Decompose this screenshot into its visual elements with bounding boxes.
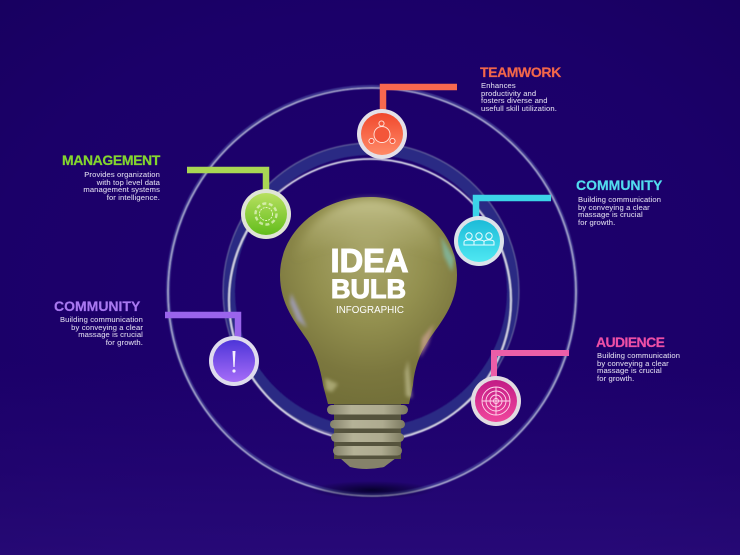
bulb title: IDEA <box>330 242 408 279</box>
bulb title: BULB <box>331 274 406 304</box>
text: community right: massage is crucial <box>578 210 643 219</box>
text: audience: Building communication <box>597 351 680 360</box>
bulb title <box>330 242 408 316</box>
inner glass ring <box>223 143 519 441</box>
light bulb <box>280 197 457 469</box>
text: community left: by conveying a clear <box>71 323 143 332</box>
connector: community left <box>165 315 238 342</box>
heading: teamwork: TEAMWORK <box>480 64 561 80</box>
node: teamwork <box>357 109 407 159</box>
icon: team circle <box>369 121 395 144</box>
text: community left <box>60 315 143 347</box>
node: community left <box>209 336 259 386</box>
outer glass ring <box>168 87 576 496</box>
text: teamwork: Enhances <box>481 81 516 90</box>
heading: community right: COMMUNITY <box>576 177 662 193</box>
connector: audience <box>494 353 569 382</box>
text: teamwork <box>481 81 557 113</box>
icon: people <box>464 233 494 245</box>
heading: community left: COMMUNITY <box>54 298 140 314</box>
heading: audience: AUDIENCE <box>596 334 664 350</box>
text: management: with top level data <box>97 178 160 187</box>
icon: target <box>482 387 510 415</box>
text: community right: for growth. <box>578 218 615 227</box>
node: management <box>241 189 291 239</box>
text: community left: Building communication <box>60 315 143 324</box>
text: management: for intelligence. <box>107 193 160 202</box>
text: teamwork: productivity and <box>481 89 536 98</box>
icon: exclamation mark <box>232 351 236 373</box>
text: community right <box>578 195 661 227</box>
heading: management: MANAGEMENT <box>62 152 160 168</box>
text: teamwork: usefull skill utilization. <box>481 104 557 113</box>
text: community right: Building communication <box>578 195 661 204</box>
node: audience <box>471 376 521 426</box>
top highlight <box>294 200 444 262</box>
icon: gear <box>256 204 276 224</box>
connector: community right <box>476 198 551 222</box>
bulb screw base <box>327 403 408 469</box>
text: audience: by conveying a clear <box>597 359 669 368</box>
ground shadow <box>310 481 434 499</box>
text: management <box>83 170 160 202</box>
text: community right: by conveying a clear <box>578 203 650 212</box>
text: management: management systems <box>83 185 160 194</box>
text: management: Provides organization <box>84 170 160 179</box>
node: community right <box>454 216 504 266</box>
text: community left: massage is crucial <box>78 330 143 339</box>
connector: teamwork <box>383 87 457 118</box>
text: audience: for growth. <box>597 374 634 383</box>
bulb title: INFOGRAPHIC <box>336 304 404 316</box>
reflections <box>290 236 454 398</box>
text: audience: massage is crucial <box>597 366 662 375</box>
bulb glass <box>280 197 457 404</box>
text: audience <box>597 351 680 383</box>
connector: management <box>187 170 266 196</box>
text: community left: for growth. <box>106 338 143 347</box>
text: teamwork: fosters diverse and <box>481 96 548 105</box>
